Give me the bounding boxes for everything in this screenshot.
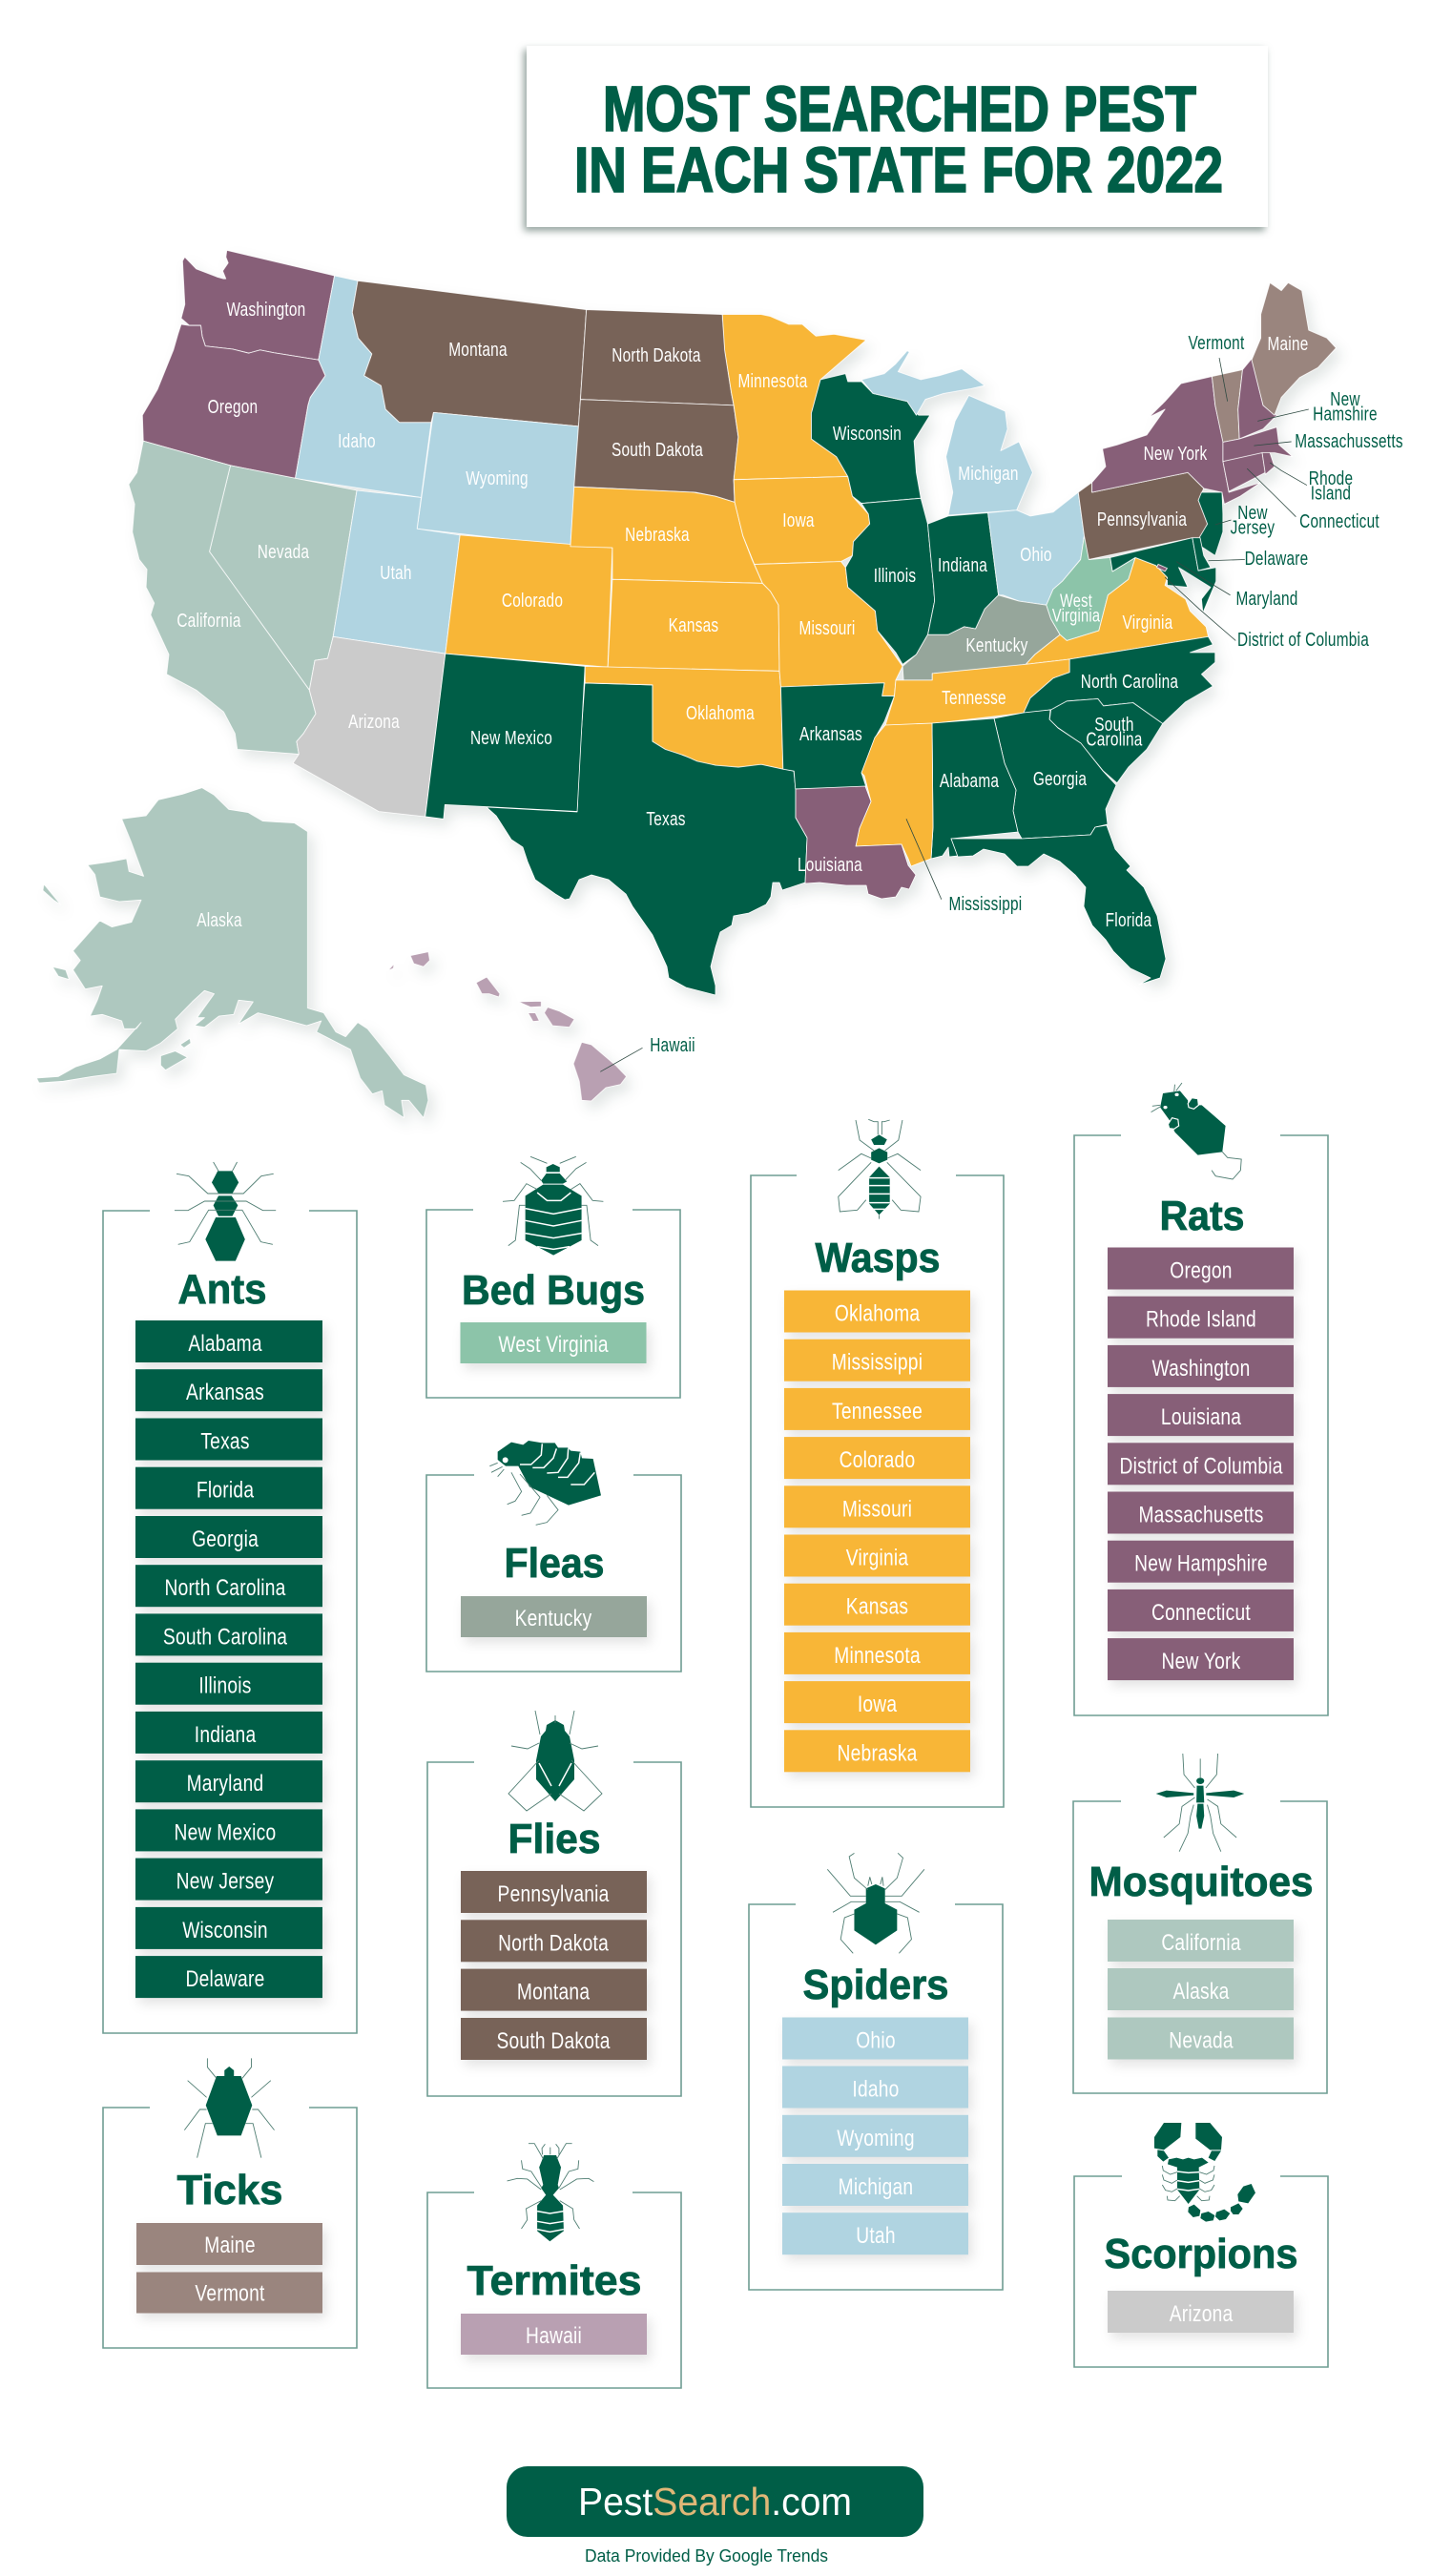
chip: California xyxy=(1108,1920,1294,1962)
state: Alabama xyxy=(931,718,1018,859)
state: New York xyxy=(1092,377,1261,504)
state: Idaho xyxy=(295,276,431,497)
chip: Alaska xyxy=(1108,1968,1294,2010)
heading: Ticks: Ticks xyxy=(177,2167,282,2213)
label: California: California xyxy=(176,610,241,631)
chip: Mississippi: Mississippi xyxy=(832,1349,923,1375)
chip: Ohio xyxy=(782,2017,968,2059)
chip: North Dakota: North Dakota xyxy=(498,1929,610,1956)
chip: Florida: Florida xyxy=(197,1477,255,1503)
chip: Delaware: Delaware xyxy=(186,1965,264,1992)
state: Florida xyxy=(951,825,1166,985)
chip: Arizona: Arizona xyxy=(1170,2300,1234,2327)
chip: Virginia: Virginia xyxy=(846,1544,909,1570)
chip: Maine: Maine xyxy=(204,2232,256,2258)
chip: New York: New York xyxy=(1162,1648,1240,1674)
list: ticks states xyxy=(136,2223,322,2313)
label: Rhode Island: Rhode xyxy=(1309,467,1353,488)
state: Ohio xyxy=(988,492,1084,605)
panel: wasps xyxy=(751,1119,1004,1807)
icon: ant xyxy=(175,1162,276,1261)
chip: Michigan xyxy=(782,2164,968,2206)
state: Arkansas xyxy=(780,683,894,789)
state: New Jersey xyxy=(1198,492,1223,555)
label: Mississippi: Mississippi xyxy=(949,893,1022,914)
state: New Hampshire xyxy=(1238,359,1276,439)
list: flies states xyxy=(461,1871,647,2060)
chip: Michigan: Michigan xyxy=(839,2173,913,2200)
frame: spiders xyxy=(749,1904,1003,2290)
label: North Carolina: North Carolina xyxy=(1081,671,1178,692)
chip: Massachusetts xyxy=(1108,1492,1294,1534)
chip: Arkansas xyxy=(135,1369,322,1411)
list: scorpions states xyxy=(1108,2291,1294,2333)
chip: New Hampshire xyxy=(1108,1541,1294,1583)
chip: Virginia xyxy=(784,1534,970,1576)
map of the United States xyxy=(36,250,1403,1118)
state: North Dakota xyxy=(580,310,734,405)
footer logo xyxy=(507,2466,923,2537)
chip: Hawaii xyxy=(461,2314,647,2355)
state: Maryland xyxy=(1110,538,1216,613)
icon: bed bug xyxy=(503,1156,603,1256)
label: Tennesse: Tennesse xyxy=(942,687,1006,708)
state: Wisconsin xyxy=(811,374,930,504)
heading: Termites: Termites xyxy=(467,2257,641,2304)
heading: Wasps: Wasps xyxy=(815,1235,941,1281)
chip: Tennessee xyxy=(784,1388,970,1430)
state: Louisiana xyxy=(796,786,916,899)
chip: Missouri: Missouri xyxy=(842,1495,912,1522)
state: Missouri xyxy=(755,562,902,696)
state: Rhode Island xyxy=(1262,453,1275,474)
state: Oklahoma xyxy=(585,666,783,769)
chip: Utah: Utah xyxy=(856,2222,896,2249)
label: Ohio: Ohio xyxy=(1020,544,1052,565)
chip: Idaho xyxy=(782,2067,968,2109)
chip: Nevada xyxy=(1108,2017,1294,2059)
label: Maine: Maine xyxy=(1267,333,1309,354)
chip: Kansas xyxy=(784,1584,970,1626)
label: Iowa: Iowa xyxy=(782,509,815,530)
frame: bed bugs xyxy=(426,1210,680,1398)
chip: New York xyxy=(1108,1638,1294,1680)
chip: Rhode Island xyxy=(1108,1297,1294,1339)
chip: New Mexico: New Mexico xyxy=(175,1818,276,1845)
chip: Idaho: Idaho xyxy=(852,2075,900,2102)
state: District of Columbia xyxy=(1157,564,1168,571)
chip: Rhode Island: Rhode Island xyxy=(1146,1306,1256,1332)
chip: Colorado xyxy=(784,1437,970,1479)
state: Illinois xyxy=(845,498,935,664)
chip: Oregon: Oregon xyxy=(1170,1257,1233,1283)
chip: Utah xyxy=(782,2212,968,2254)
label: Massachussetts: Massachussetts xyxy=(1295,430,1403,451)
chip: Oklahoma xyxy=(784,1290,970,1332)
chip: South Dakota xyxy=(461,2018,647,2060)
list: ants states xyxy=(135,1320,322,1998)
chip: Texas xyxy=(135,1418,322,1460)
chip: Washington: Washington xyxy=(1151,1355,1251,1381)
state: Kentucky xyxy=(902,595,1060,680)
label: Wyoming: Wyoming xyxy=(466,467,529,488)
chip: Connecticut: Connecticut xyxy=(1151,1599,1251,1625)
label: Connecticut: Connecticut xyxy=(1299,510,1379,531)
chip: Missouri xyxy=(784,1485,970,1527)
panel: rats xyxy=(1074,1083,1328,1715)
label: Alaska: Alaska xyxy=(197,909,242,930)
chip: West Virginia: West Virginia xyxy=(498,1331,609,1358)
chip: Connecticut xyxy=(1108,1589,1294,1631)
label: Rhode Island: Island xyxy=(1311,483,1351,504)
label: Oregon: Oregon xyxy=(208,396,258,417)
state: South Carolina xyxy=(1049,698,1163,783)
chip: Kentucky: Kentucky xyxy=(515,1605,591,1631)
chip: North Carolina xyxy=(135,1565,322,1607)
chip: Hawaii: Hawaii xyxy=(526,2322,582,2349)
chip: Delaware xyxy=(135,1956,322,1998)
icon: wasp xyxy=(839,1119,921,1219)
label: New Hamshire: Hamshire xyxy=(1313,404,1378,425)
list: bed bugs states xyxy=(460,1322,647,1363)
icon: termite xyxy=(508,2144,593,2241)
chip: Indiana xyxy=(135,1712,322,1754)
chip: Minnesota xyxy=(784,1632,970,1674)
chip: Tennessee: Tennessee xyxy=(832,1398,923,1423)
heading: Mosquitoes: Mosquitoes xyxy=(1089,1859,1313,1905)
state: Tennessee xyxy=(885,659,1069,726)
label: Florida: Florida xyxy=(1106,909,1151,930)
icon: tick xyxy=(184,2058,275,2158)
chip: Nevada: Nevada xyxy=(1169,2026,1234,2053)
label: Louisiana: Louisiana xyxy=(798,854,862,875)
label: South Dakota: South Dakota xyxy=(612,439,703,460)
chip: North Carolina: North Carolina xyxy=(165,1574,286,1601)
label: Montana: Montana xyxy=(448,339,508,360)
chip: Texas: Texas xyxy=(200,1427,250,1454)
chip: Pennsylvania xyxy=(461,1871,647,1913)
state: Virginia xyxy=(1026,557,1209,664)
state: Delaware xyxy=(1192,538,1211,571)
label: North Dakota: North Dakota xyxy=(612,344,701,365)
chip: Mississippi xyxy=(784,1340,970,1381)
chip: Minnesota: Minnesota xyxy=(834,1642,921,1668)
chip: Florida xyxy=(135,1467,322,1509)
chip: Indiana: Indiana xyxy=(195,1721,257,1747)
label: Kansas: Kansas xyxy=(669,614,718,635)
state: West Virginia xyxy=(1047,536,1135,640)
label: Illinois: Illinois xyxy=(874,565,916,586)
source note: Data Provided By Google Trends xyxy=(585,2545,828,2566)
chip: Wisconsin xyxy=(135,1907,322,1949)
chip: Arkansas: Arkansas xyxy=(186,1379,264,1405)
chip: Wyoming: Wyoming xyxy=(837,2125,915,2150)
chip: Kentucky xyxy=(461,1596,647,1637)
list: mosquitoes states xyxy=(1108,1920,1294,2059)
state: Indiana xyxy=(927,513,999,635)
label: Virginia: Virginia xyxy=(1123,612,1172,633)
frame: scorpions xyxy=(1074,2176,1328,2367)
chip: Oklahoma: Oklahoma xyxy=(835,1299,921,1326)
frame: wasps xyxy=(751,1175,1004,1807)
state: Iowa xyxy=(734,476,870,564)
list: rats states xyxy=(1108,1248,1294,1680)
chip: North Dakota xyxy=(461,1920,647,1962)
label: South Carolina: South xyxy=(1094,714,1134,735)
state: South Dakota xyxy=(574,400,738,502)
icon: mosquito xyxy=(1156,1754,1244,1852)
label: Hawaii: Hawaii xyxy=(650,1034,695,1055)
panel: bed bugs xyxy=(426,1156,680,1398)
panel: flies xyxy=(427,1711,681,2096)
chip: Vermont: Vermont xyxy=(195,2279,265,2306)
label: Delaware: Delaware xyxy=(1245,548,1308,569)
label: Missouri: Missouri xyxy=(798,617,856,638)
label: Arkansas: Arkansas xyxy=(799,723,862,744)
heading: Flies: Flies xyxy=(508,1816,601,1862)
leader lines xyxy=(600,358,1309,1071)
chip: Kansas: Kansas xyxy=(846,1593,908,1619)
label: District of Columbia: District of Columbia xyxy=(1237,629,1369,650)
chip: Pennsylvania: Pennsylvania xyxy=(498,1880,610,1907)
state: Georgia xyxy=(994,710,1116,839)
state: Vermont xyxy=(1212,370,1242,442)
label: New Mexico: New Mexico xyxy=(470,727,552,748)
state: California xyxy=(129,441,316,754)
state: New Mexico xyxy=(425,654,585,819)
chip: Louisiana xyxy=(1108,1394,1294,1436)
label: Arizona: Arizona xyxy=(348,711,400,732)
icon: spider xyxy=(827,1853,924,1953)
chip: Wyoming xyxy=(782,2115,968,2157)
title xyxy=(527,46,1268,227)
heading: Rats: Rats xyxy=(1160,1193,1244,1239)
chip: Montana: Montana xyxy=(517,1979,591,2005)
chip: Iowa xyxy=(784,1681,970,1723)
state: Colorado xyxy=(446,535,612,667)
state: Oregon xyxy=(142,324,325,478)
icon: fly xyxy=(508,1711,602,1811)
chip: Oregon xyxy=(1108,1248,1294,1290)
state: Nevada xyxy=(210,466,357,690)
panel: termites xyxy=(427,2144,681,2388)
label: Pennsylvania: Pennsylvania xyxy=(1097,509,1187,530)
state: Minnesota xyxy=(722,314,866,480)
label: Minnesota: Minnesota xyxy=(737,370,808,391)
title: MOST SEARCHED PEST xyxy=(603,73,1196,145)
label: Idaho: Idaho xyxy=(338,430,376,451)
chip: Georgia: Georgia xyxy=(192,1526,259,1552)
label: Alabama: Alabama xyxy=(940,770,999,791)
chip: Louisiana: Louisiana xyxy=(1161,1403,1242,1430)
label: West Virginia: West xyxy=(1060,591,1092,611)
chip: Washington xyxy=(1108,1345,1294,1387)
label: South Carolina: Carolina xyxy=(1086,729,1143,750)
chip: New Jersey: New Jersey xyxy=(176,1868,274,1894)
heading: Ants: Ants xyxy=(177,1266,267,1313)
chip: Alabama xyxy=(135,1320,322,1362)
panel: ticks xyxy=(103,2058,357,2348)
state: Mississippi xyxy=(856,723,933,866)
chip: Colorado: Colorado xyxy=(840,1446,915,1473)
label: New York: New York xyxy=(1144,443,1207,464)
panel: fleas xyxy=(426,1441,681,1672)
chip: New Mexico xyxy=(135,1809,322,1851)
chip: Arizona xyxy=(1108,2291,1294,2333)
frame: ants xyxy=(103,1211,357,2033)
state: North Carolina xyxy=(1024,636,1215,723)
icon: scorpion xyxy=(1154,2123,1255,2222)
footer logo: PestSearch.com xyxy=(578,2480,852,2524)
label: Georgia: Georgia xyxy=(1033,768,1087,789)
state: Kansas xyxy=(608,579,779,671)
state: Washington xyxy=(181,250,335,360)
label: West Virginia: Virginia xyxy=(1052,606,1100,626)
label: Colorado: Colorado xyxy=(502,590,563,611)
label: Michigan: Michigan xyxy=(958,463,1019,484)
heading: Spiders: Spiders xyxy=(803,1962,948,2008)
frame: termites xyxy=(427,2192,681,2388)
chip: Maryland: Maryland xyxy=(187,1770,263,1797)
frame: mosquitoes xyxy=(1073,1801,1327,2093)
icon: flea xyxy=(489,1441,601,1525)
chip: Nebraska: Nebraska xyxy=(838,1739,918,1766)
panel: mosquitoes xyxy=(1073,1754,1327,2093)
chip: California: California xyxy=(1161,1929,1241,1956)
chip: Maryland xyxy=(135,1760,322,1802)
label: Nebraska: Nebraska xyxy=(625,524,690,545)
chip: West Virginia xyxy=(460,1322,647,1363)
chip: Wisconsin: Wisconsin xyxy=(182,1917,268,1942)
list: spiders states xyxy=(782,2017,968,2254)
state: Michigan xyxy=(861,351,1032,515)
frame: fleas xyxy=(426,1475,681,1672)
frame: ticks xyxy=(103,2108,357,2348)
frame: rats xyxy=(1074,1135,1328,1715)
state: Nebraska xyxy=(570,487,762,583)
state: Maine xyxy=(1252,282,1336,415)
chip: Alaska: Alaska xyxy=(1173,1978,1230,2005)
label: New Hamshire: New xyxy=(1330,388,1360,409)
state: Wyoming xyxy=(417,412,578,547)
chip: South Dakota: South Dakota xyxy=(496,2027,611,2054)
chip: District of Columbia: District of Columbia xyxy=(1120,1452,1283,1479)
state: Arizona xyxy=(293,636,446,817)
label: Vermont: Vermont xyxy=(1189,332,1244,353)
label: New Jersey: Jersey xyxy=(1231,517,1275,538)
label: Maryland: Maryland xyxy=(1235,588,1298,609)
state: Connecticut xyxy=(1223,453,1265,491)
state: Alaska xyxy=(36,788,428,1118)
state: Pennsylvania xyxy=(1078,472,1208,559)
title: IN EACH STATE FOR 2022 xyxy=(574,135,1223,206)
label: Indiana: Indiana xyxy=(938,554,987,575)
list: fleas states xyxy=(461,1596,647,1637)
state: Texas xyxy=(487,683,807,995)
label: Wisconsin: Wisconsin xyxy=(833,423,902,444)
chip: Illinois: Illinois xyxy=(198,1672,252,1698)
state: Montana xyxy=(352,280,587,426)
label: New Jersey: New xyxy=(1237,502,1268,523)
chip: Georgia xyxy=(135,1516,322,1558)
heading: Scorpions: Scorpions xyxy=(1105,2231,1297,2277)
panel: scorpions xyxy=(1074,2123,1328,2367)
chip: Vermont xyxy=(136,2273,322,2313)
chip: Montana xyxy=(461,1969,647,2011)
chip: Illinois xyxy=(135,1663,322,1705)
state: Massachusetts xyxy=(1223,427,1293,462)
chip: Alabama: Alabama xyxy=(188,1330,262,1357)
state: Hawaii xyxy=(388,952,627,1101)
state: Utah xyxy=(333,490,460,654)
label: Kentucky: Kentucky xyxy=(965,634,1028,655)
heading: Bed Bugs: Bed Bugs xyxy=(462,1267,645,1314)
chip: Ohio: Ohio xyxy=(856,2026,896,2053)
label: Utah: Utah xyxy=(380,562,412,583)
label: Washington: Washington xyxy=(227,299,305,320)
list: wasps states xyxy=(784,1290,970,1772)
label: Oklahoma: Oklahoma xyxy=(686,702,755,723)
chip: South Carolina xyxy=(135,1613,322,1655)
chip: Iowa: Iowa xyxy=(858,1691,898,1717)
heading: Fleas: Fleas xyxy=(504,1540,605,1587)
chip: Massachusetts: Massachusetts xyxy=(1138,1501,1264,1527)
chip: Maine xyxy=(136,2223,322,2265)
frame: flies xyxy=(427,1762,681,2096)
panel: ants xyxy=(103,1162,357,2033)
map labels xyxy=(176,299,1403,1055)
label: Nevada: Nevada xyxy=(258,541,309,562)
chip: New Jersey xyxy=(135,1859,322,1901)
panel: spiders xyxy=(749,1853,1003,2290)
list: termites states xyxy=(461,2314,647,2355)
chip: South Carolina: South Carolina xyxy=(163,1623,288,1650)
icon: rat xyxy=(1151,1083,1241,1179)
chip: Nebraska xyxy=(784,1730,970,1772)
chip: New Hampshire: New Hampshire xyxy=(1134,1550,1268,1576)
label: Texas: Texas xyxy=(646,808,686,829)
chip: District of Columbia xyxy=(1108,1443,1294,1485)
